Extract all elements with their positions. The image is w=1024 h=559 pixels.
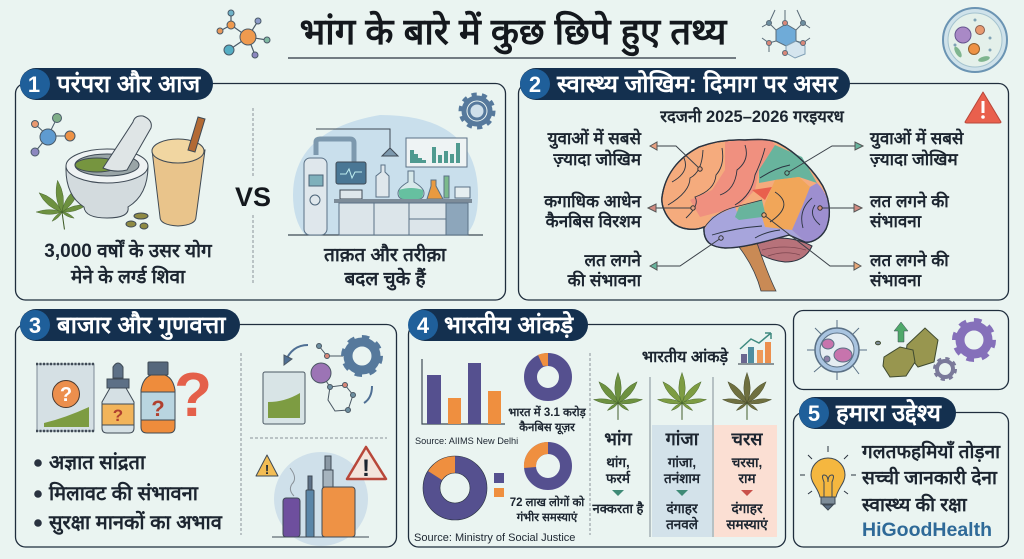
bullet list: अज्ञात सांद्रता (49, 452, 146, 474)
callout right 1 (785, 128, 965, 175)
icon: light bulb (800, 446, 856, 510)
callout left 3: की संभावना (567, 270, 642, 290)
column: charas: दंगाहर (731, 501, 763, 516)
legend squares (494, 473, 504, 497)
column: bhang: नक्करता है (592, 501, 645, 516)
panel 4: Indian statistics (408, 309, 786, 547)
icon: rising chart (738, 333, 774, 364)
callout left 3: लत लगने (584, 250, 642, 270)
callout right 3: लत लगने की (869, 250, 949, 270)
heading pill 4 (408, 309, 588, 341)
column: charas (722, 372, 772, 532)
icon: mortar and pestle (66, 116, 151, 218)
big donut chart (423, 456, 487, 520)
icon: unknown sachet: ? (60, 384, 72, 406)
caption left: 3,000 वर्षों के उसर योग (44, 239, 213, 262)
bullet list (34, 452, 223, 535)
callout right 2: लत लगने की (869, 191, 949, 211)
icon: cannabis leaf by mortar (32, 177, 90, 233)
callout left 2: कैनबिस विरशम (545, 211, 642, 231)
icon: small molecule (31, 114, 75, 156)
vs divider: VS (235, 182, 271, 212)
callout right 3 (762, 213, 949, 290)
panel: cell, resin and gears (794, 310, 1008, 390)
icon: unknown sachet (36, 364, 95, 431)
heading pill 5 (799, 397, 956, 429)
icon: dropper bottle (102, 363, 134, 433)
goals text: सच्ची जानकारी देना (861, 466, 998, 489)
title: भांग के बारे में कुछ छिपे हुए तथ्य (300, 10, 728, 57)
icon: bag and molecule (263, 338, 380, 424)
callout left 1: युवाओं में सबसे (547, 128, 642, 149)
donut caption top (508, 405, 587, 435)
callout left 1 (547, 128, 702, 171)
donut caption top: भारत में 3.1 करोड़ (508, 405, 587, 419)
column: charas: राम (737, 471, 756, 486)
heading pill 1: 1 (28, 72, 40, 97)
callout left 3 (567, 236, 723, 290)
heading pill 3: 3 (29, 313, 41, 338)
column: charas: समस्याएं (725, 517, 768, 532)
icon: chemical structure (762, 10, 810, 58)
column: bhang: फरर्म (605, 470, 631, 486)
icon: large gear (956, 322, 992, 358)
icon: vapes with warnings (256, 447, 386, 546)
callout right 2: संभावना (869, 212, 922, 231)
icon: virus cell (807, 320, 867, 380)
donut caption bottom: गंभीर समस्याएं (516, 510, 578, 524)
icon: bhang drink glass (126, 117, 205, 229)
callout right 2 (818, 191, 949, 231)
panel 1: tradition and today (16, 68, 506, 300)
icon: petri dish cell (943, 8, 1007, 72)
source ministry: Source: Ministry of Social Justice (414, 532, 575, 544)
icon: resin rocks (876, 328, 938, 377)
goals text: स्वास्थ्य की रक्षा (861, 493, 968, 516)
icon: small gear (935, 359, 955, 379)
dashed dividers (241, 353, 387, 535)
panel 2: health risk brain (518, 68, 1008, 300)
goals text: HiGoodHealth (862, 519, 992, 541)
column: ganja: गांजा, (667, 455, 696, 470)
icon: gear wrench (461, 95, 493, 127)
bullet list: मिलावट की संभावना (48, 481, 199, 505)
heading pill 4: भारतीय आंकड़े (444, 311, 574, 339)
panel 5: our purpose (794, 397, 1008, 547)
column: ganja: दंगाहर (666, 501, 698, 516)
goals text (861, 440, 1001, 541)
donut chart 3.1 crore (530, 353, 566, 394)
illustration: laboratory (288, 115, 483, 235)
heading pill 3: बाजार और गुणवत्ता (56, 311, 226, 340)
donut caption bottom: 72 लाख लोगों को (510, 495, 585, 509)
caption left (44, 239, 213, 288)
icon: orange bottle: ? (151, 396, 165, 421)
column: ganja (657, 372, 707, 532)
callout left 1: ज़्यादा जोखिम (552, 149, 642, 169)
caption right: बदल चुके हैं (343, 267, 426, 291)
callout left 2 (543, 191, 695, 231)
bar chart (422, 359, 505, 424)
column backgrounds (650, 377, 777, 537)
column: charas: चरसा, (731, 455, 762, 470)
caption left: मेने के लर्ग्ड शिवा (70, 265, 186, 288)
heading pill 4: 4 (417, 313, 430, 338)
heading pill 5: हमारा उद्देश्य (835, 399, 942, 427)
column: ganja: गांजा (665, 429, 700, 449)
column: bhang (592, 372, 645, 516)
column: charas: चरस (731, 429, 763, 449)
column: bhang: भांग (604, 429, 633, 449)
dashed divider (589, 353, 591, 535)
goals text: गलतफहमियाँ तोड़ना (861, 440, 1001, 463)
subheading: भारतीय आंकड़े (642, 347, 729, 366)
donut caption bottom (510, 495, 585, 524)
icon: green up arrow (894, 322, 908, 342)
icon: vapes with warnings: ! (362, 455, 370, 482)
icon: dropper bottle: ? (113, 406, 123, 425)
callout left 2: कगाधिक आधेन (543, 191, 642, 211)
icon: warning triangle (965, 92, 1001, 123)
donut caption top: कैनबिस यूज़र (518, 420, 576, 435)
icon: orange bottle (141, 362, 175, 433)
column: ganja: तनंशाम (663, 471, 701, 486)
callout right 3: संभावना (869, 271, 922, 290)
heading pill 2: 2 (529, 72, 541, 97)
icon: vapes with warnings: ! (265, 462, 269, 477)
callout right 1: युवाओं में सबसे (869, 128, 965, 149)
heading pill 1: परंपरा और आज (56, 70, 201, 98)
subtitle: रदजनी 2025–2026 गरइयरध (659, 106, 845, 126)
heading pill 5: 5 (808, 401, 820, 426)
panel 3: market and quality (16, 309, 396, 547)
brain illustration (662, 139, 829, 291)
heading pill 1 (20, 68, 213, 100)
heading pill 2: स्वास्थ्य जोखिम: दिमाग पर असर (556, 70, 839, 98)
callout right 1: ज़्यादा जोखिम (869, 149, 958, 169)
icon: red question mark: ? (174, 361, 212, 430)
donut chart 72 lakh (524, 442, 566, 484)
caption right (323, 243, 447, 291)
icon: molecule top left (217, 10, 270, 58)
caption right: ताक़त और तरीक़ा (323, 243, 447, 266)
heading pill 3 (20, 309, 240, 341)
column: ganja: तनवले (665, 516, 699, 532)
column: bhang: थांग, (606, 455, 630, 470)
source AIIMS: Source: AIIMS New Delhi (415, 436, 518, 446)
bullet list: सुरक्षा मानकों का अभाव (48, 510, 223, 535)
